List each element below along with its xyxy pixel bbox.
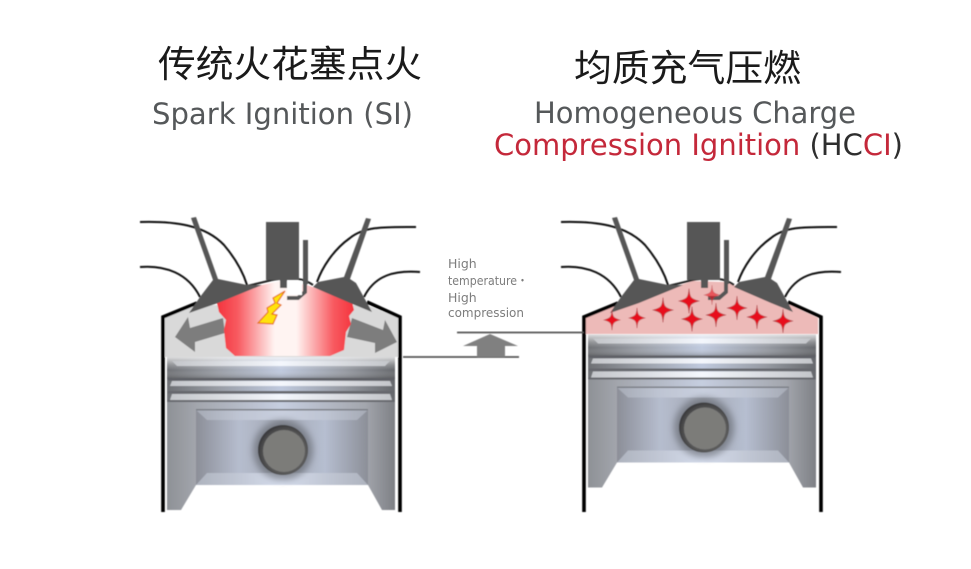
title: spark ignition Chinese: 传统火花塞点火	[158, 44, 422, 85]
spark gap	[287, 281, 302, 295]
compressed charge	[585, 281, 818, 334]
diagram: HCCI engine	[561, 217, 841, 512]
piston	[588, 334, 816, 488]
subtitle: Compression Ignition (HCCI): Compression Ignition (HCCI)	[494, 128, 903, 162]
arrow: compression between pistons	[403, 332, 584, 357]
callout: high temperature and compression	[448, 256, 528, 320]
cylinder head and valves	[140, 217, 420, 512]
flame front	[217, 281, 354, 356]
subtitle: Homogeneous Charge: Homogeneous Charge	[534, 96, 856, 130]
title: HCCI Chinese: 均质充气压燃	[574, 48, 801, 89]
cylinder head and valves	[561, 217, 841, 512]
callout: high temperature and compression: High	[448, 290, 477, 305]
piston	[167, 357, 395, 510]
icon: spark	[258, 291, 285, 324]
subtitle: Spark Ignition: Spark Ignition (SI)	[152, 97, 413, 131]
auto-ignition stars	[604, 285, 792, 333]
arrow: right expansion	[347, 318, 397, 353]
callout: high temperature and compression: High	[448, 256, 477, 271]
callout: high temperature and compression: compression	[448, 305, 524, 320]
combustion chamber	[165, 305, 398, 357]
arrow: left expansion	[175, 317, 225, 352]
callout: high temperature and compression: temperature・	[448, 273, 528, 288]
diagram: spark ignition engine	[140, 217, 420, 512]
